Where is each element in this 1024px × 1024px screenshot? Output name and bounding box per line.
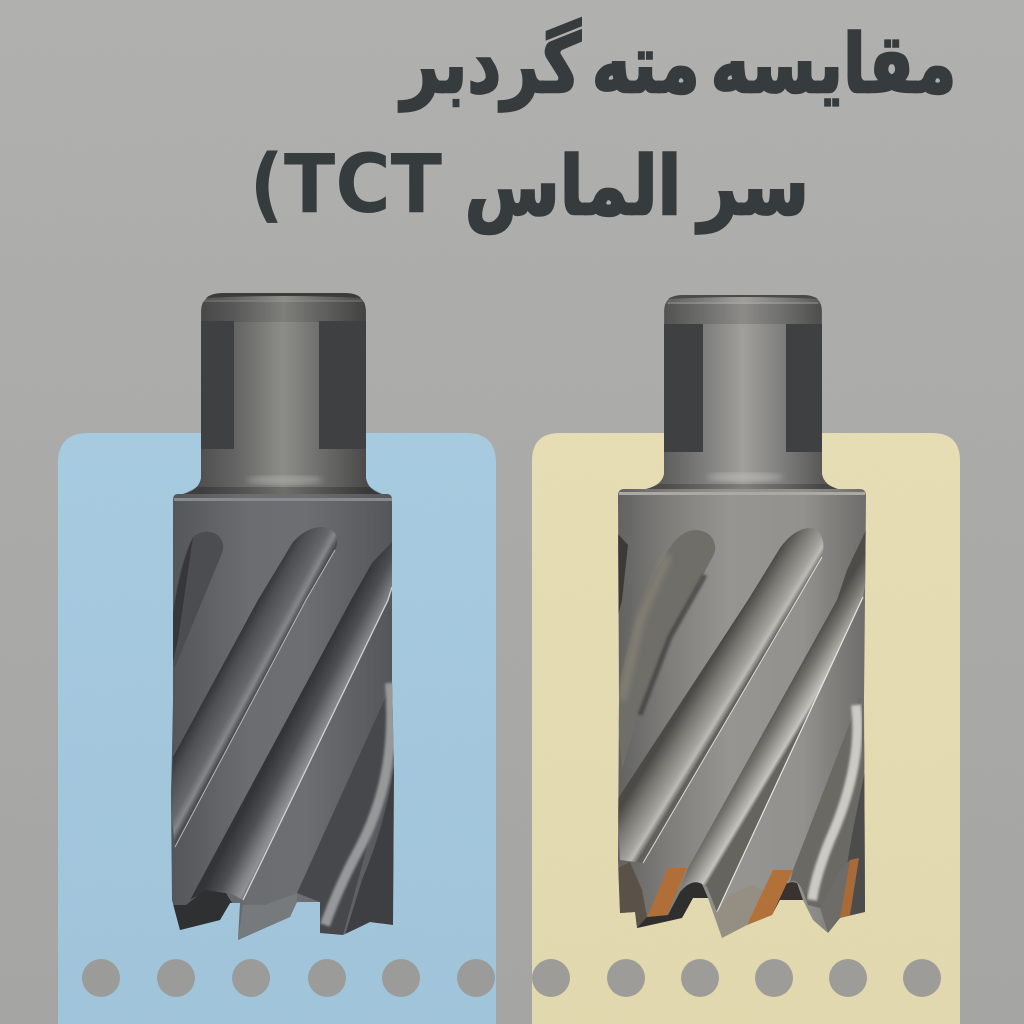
right dark strip [345,767,394,935]
title: second line: TCT) [250,138,442,232]
bottom dark tooth shadows [637,882,708,929]
title: first line: مقایسه مته گردبر [401,18,956,112]
flute 2 [680,530,866,912]
flute 0 [618,530,715,770]
title: second line [250,138,809,236]
body: right bit cylinder [618,489,866,938]
shank: left bit neck and head [183,293,382,498]
flats: right bit drive flats [664,324,822,452]
panel: beige card with punched holes [532,433,960,1024]
holes: beige card perforation row [532,959,941,997]
worn land tooth [717,885,763,938]
right dark strip [846,773,865,916]
far left strip [618,534,628,614]
drill bit: right, TCT carbide-tipped annular cutter [617,295,866,938]
bottom shadow teeth [172,890,232,932]
flutes: right bit helical grooves [617,528,866,938]
flute 0 [171,532,223,667]
title: second line: سر الماس [465,140,809,234]
carbide tip: second orange insert [747,870,793,925]
flute 3 [297,690,394,935]
carbide tip: first orange insert [647,868,687,917]
holes: blue card perforation row [82,959,495,997]
worn left tooth [618,862,647,928]
flutes: left bit helical grooves [170,527,394,940]
panel: blue card with punched holes [58,433,496,1024]
flute 1 [617,528,823,863]
flute 3 [790,697,866,918]
right tooth [820,860,850,933]
carbide tip: third orange insert [840,858,859,918]
shank: right bit neck and head [646,295,838,494]
body: left bit cylinder [171,494,394,940]
flute 2 [190,542,393,900]
drill bit: left, dark coated annular cutter [170,293,394,940]
flats: left bit drive flats [201,321,366,449]
flute 1 [170,527,337,847]
shoulder ring: left bit [174,498,392,501]
shoulder ring: right bit [619,492,865,495]
